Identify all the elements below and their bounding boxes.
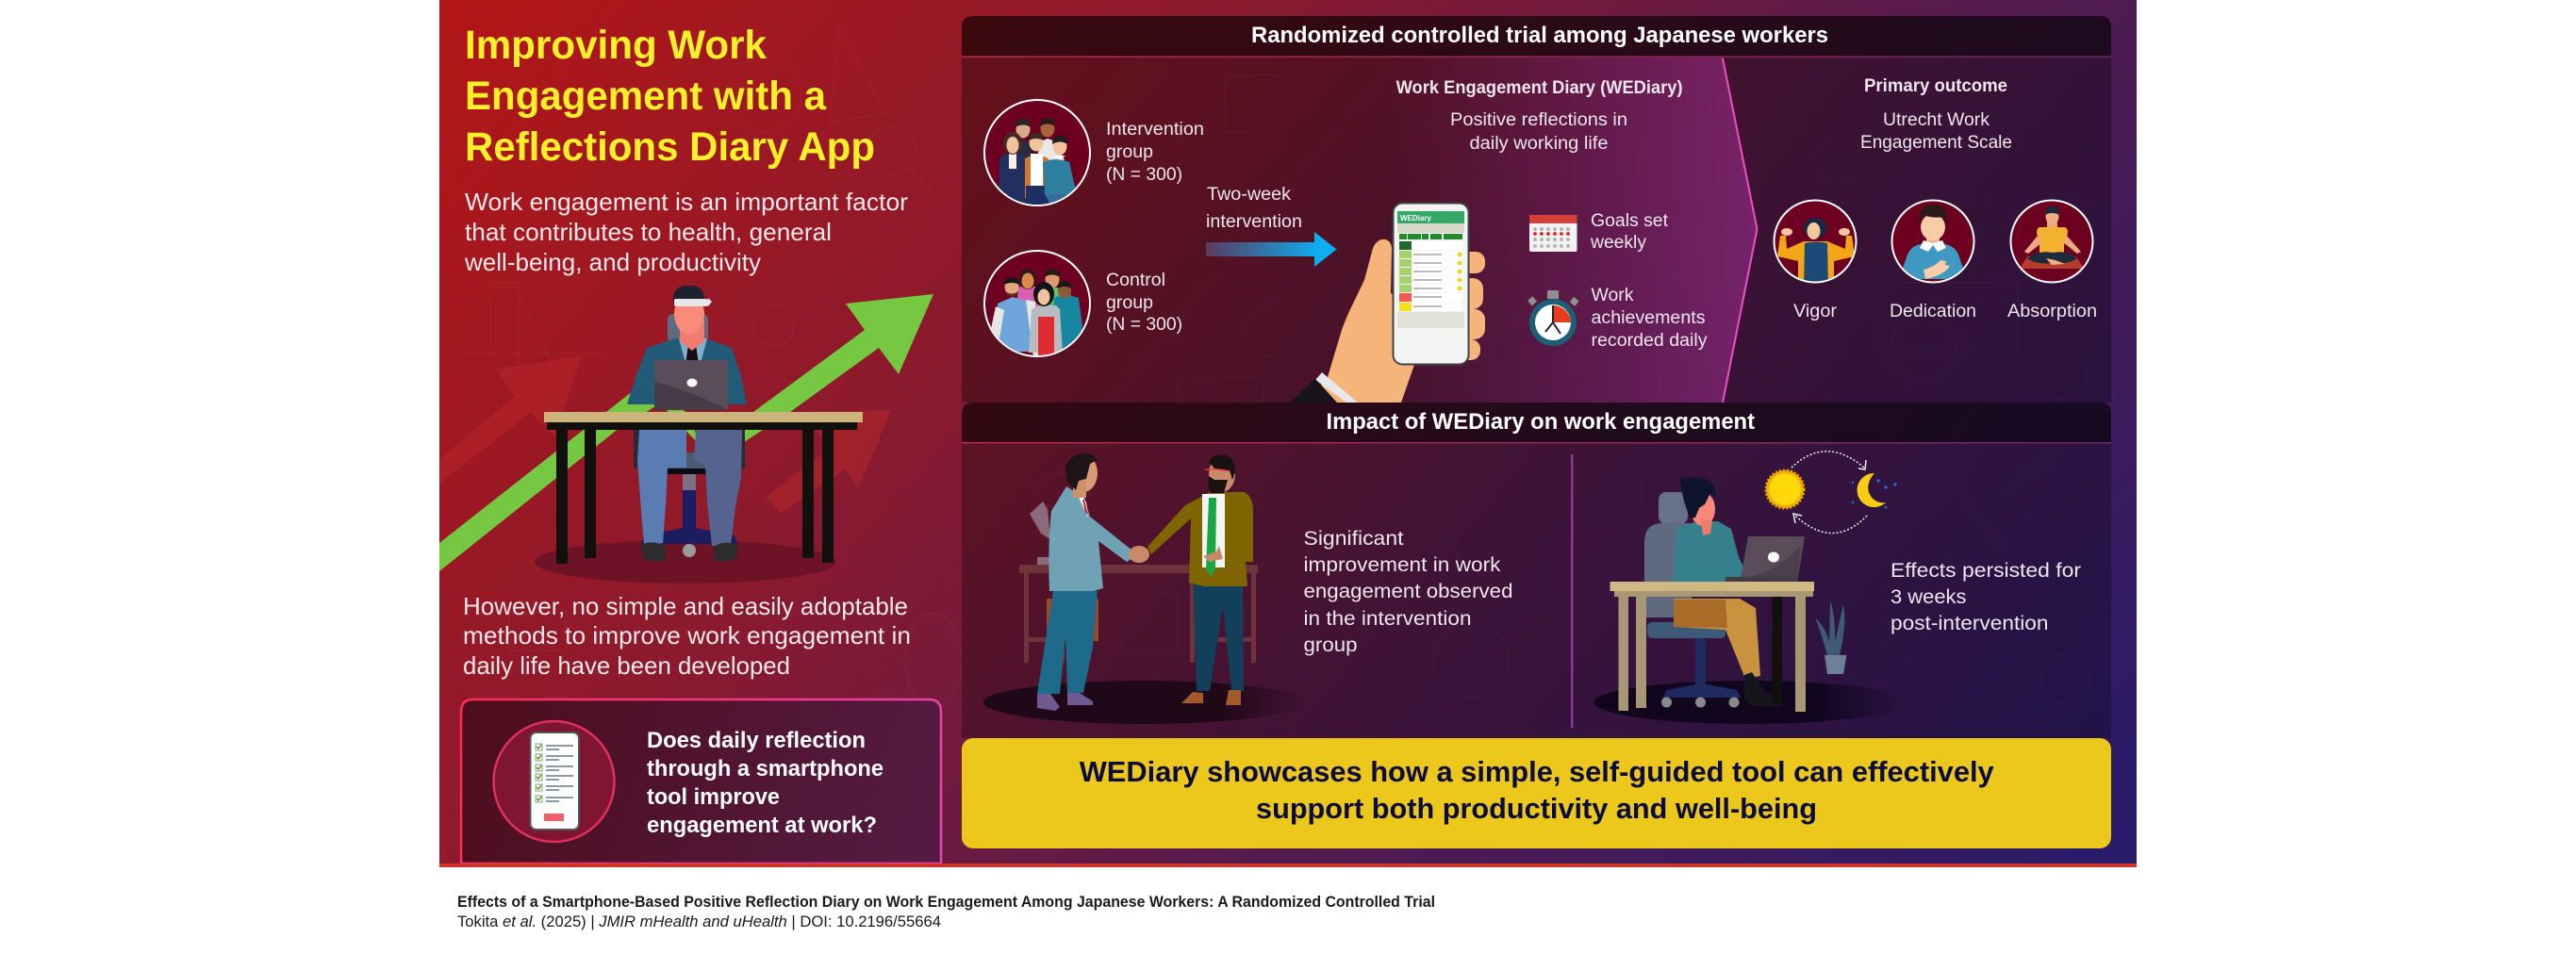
title: Improving Work: [465, 23, 767, 68]
control group label: Control: [1106, 271, 1165, 290]
question text: [647, 728, 883, 838]
background red arrows: [439, 355, 891, 514]
desk: [1610, 582, 1814, 712]
text: significant improvement: Significant: [1303, 528, 1404, 550]
intervention group label: Intervention: [1106, 120, 1204, 140]
icon: absorption: [2010, 200, 2093, 283]
text block: work engagement intro: [464, 188, 908, 276]
text: significant improvement: group: [1303, 634, 1358, 656]
citation: [457, 893, 1435, 930]
desk behind: [1019, 502, 1258, 663]
text block: work engagement intro: that contributes to health, general: [465, 218, 832, 246]
phone: WEDiary: [1400, 214, 1431, 222]
background panel: [439, 0, 2137, 864]
icon: intervention group: [984, 100, 1090, 214]
question text: engagement at work?: [647, 813, 877, 838]
illustration: handshake: [983, 453, 1304, 724]
man right: [1148, 454, 1253, 705]
intervention group label: group: [1106, 142, 1153, 162]
control group label: [1106, 271, 1182, 335]
icon: calendar: [1529, 215, 1577, 252]
header: impact: Impact of WEDiary on work engagement: [1326, 409, 1755, 435]
two-week intervention label: Two-week: [1207, 185, 1292, 205]
primary outcome text: [1860, 76, 2012, 153]
title: Reflections Diary App: [465, 124, 875, 170]
WEDiary heading and description: Positive reflections in: [1450, 110, 1627, 130]
text: effects persisted: Effects persisted for: [1891, 560, 2081, 582]
vigor dedication absorption labels: Vigor: [1793, 302, 1838, 321]
icon: day-night cycle arrows: [1792, 452, 1867, 534]
man's legs: [637, 430, 742, 562]
text block: work engagement intro: Work engagement is an important factor: [465, 188, 908, 216]
citation: Effects of a Smartphone-Based Positive Reflection Diary on Work Engagement Among Japanese Workers: A Randomized Controlled Trial: [457, 893, 1435, 911]
plant: [1815, 600, 1846, 674]
primary outcome text: Engagement Scale: [1860, 133, 2012, 153]
text block: no simple methods: methods to improve work engagement in: [463, 621, 911, 650]
icon: dedication: [1891, 200, 1974, 283]
illustration: woman working at desk: [1593, 477, 1905, 724]
man's torso and head: [627, 286, 747, 404]
man left: [1037, 453, 1132, 711]
icon: moon: [1852, 473, 1897, 508]
text block: no simple methods: daily life have been developed: [463, 651, 790, 680]
primary outcome text: Primary outcome: [1864, 76, 2007, 96]
text block: work engagement intro: well-being, and productivity: [464, 248, 761, 276]
icon: hand holding phone: [1290, 204, 1485, 403]
icon: green growth arrow: [439, 294, 933, 571]
text: effects persisted: 3 weeks: [1891, 586, 1967, 608]
chair: [1644, 492, 1741, 707]
text: significant improvement: [1303, 528, 1512, 656]
chair: [634, 314, 745, 557]
panel: impact of WEDiary: [962, 403, 2111, 738]
laptop: [654, 360, 728, 410]
title: [465, 23, 875, 170]
title: Engagement with a: [465, 74, 827, 119]
header: impact: [962, 403, 2111, 443]
goals set weekly label: [1590, 211, 1669, 253]
text: significant improvement: engagement observed: [1303, 581, 1512, 602]
goals set weekly label: weekly: [1590, 233, 1647, 253]
citation: Tokita et al. (2025) | JMIR mHealth and uHealth | DOI: 10.2196/55664: [457, 913, 941, 930]
text: effects persisted: [1891, 560, 2081, 634]
icon: control group: [984, 251, 1090, 359]
woman: [1673, 477, 1782, 706]
text block: no simple methods: However, no simple and easily adoptable: [463, 592, 908, 620]
work achievements label: Work: [1592, 286, 1634, 305]
two-week intervention label: [1206, 185, 1302, 232]
primary outcome text: Utrecht Work: [1883, 110, 1990, 130]
panel: research question: [461, 699, 941, 864]
question text: Does daily reflection: [647, 728, 866, 753]
callout: conclusion: WEDiary showcases how a simple, self-guided tool can effectively: [1080, 755, 1994, 788]
desk: [544, 412, 863, 564]
callout: conclusion: [962, 738, 2111, 848]
callout: conclusion: support both productivity and well-being: [1256, 792, 1817, 825]
header: randomized controlled trial: Randomized controlled trial among Japanese workers: [1251, 23, 1828, 48]
goals set weekly label: Goals set: [1591, 211, 1669, 231]
WEDiary heading and description: Work Engagement Diary (WEDiary): [1396, 78, 1683, 98]
text: significant improvement: in the intervention: [1303, 608, 1471, 630]
text: significant improvement: improvement in work: [1303, 554, 1501, 576]
work achievements label: [1592, 286, 1708, 351]
laptop: [1726, 536, 1805, 582]
icon: stopwatch: [1527, 290, 1579, 346]
illustration: man working at desk: [535, 286, 863, 584]
control group label: (N = 300): [1106, 315, 1182, 335]
question text: tool improve: [647, 784, 780, 810]
question text: through a smartphone: [647, 756, 883, 781]
panel: randomized controlled trial: [962, 16, 2111, 403]
control group label: group: [1106, 293, 1153, 313]
intervention group label: [1106, 120, 1204, 185]
work achievements label: recorded daily: [1592, 331, 1708, 351]
icon: smartphone checklist: [494, 721, 615, 842]
work achievements label: achievements: [1592, 308, 1705, 328]
vigor dedication absorption labels: Absorption: [2007, 302, 2097, 321]
icon: vigor: [1775, 200, 1856, 289]
WEDiary heading and description: [1396, 78, 1683, 154]
text block: no simple methods: [463, 592, 911, 680]
WEDiary heading and description: daily working life: [1469, 134, 1609, 154]
handshake: [1129, 546, 1149, 563]
text: effects persisted: post-intervention: [1891, 613, 2048, 634]
arrow: intervention: [1206, 232, 1337, 267]
vigor dedication absorption labels: Dedication: [1890, 302, 1976, 321]
icon: sun: [1766, 470, 1804, 508]
vigor dedication absorption labels: [1793, 302, 2097, 321]
intervention group label: (N = 300): [1106, 165, 1182, 185]
two-week intervention label: intervention: [1206, 212, 1302, 232]
phone: [1394, 204, 1469, 364]
header: randomized controlled trial: [962, 16, 2111, 58]
